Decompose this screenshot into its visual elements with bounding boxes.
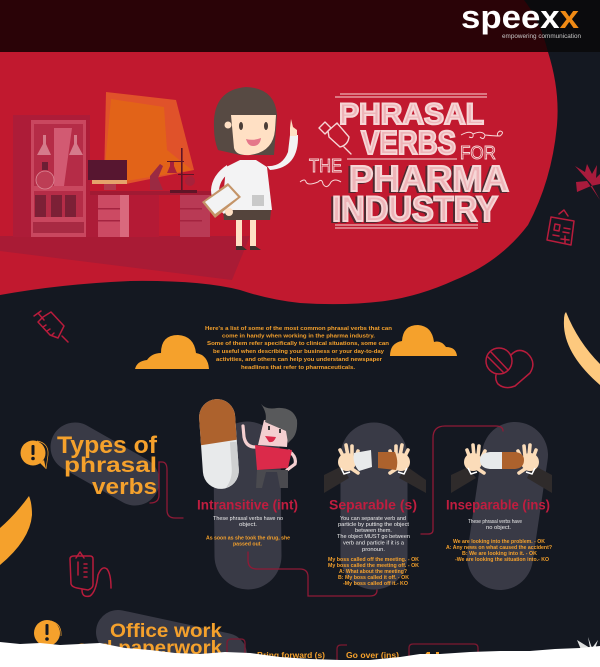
text: separable description: -My boss called off it.- KO [343,581,409,587]
logo: speexx: empowering communication [502,34,581,40]
sleeves [324,466,426,493]
text: inseparable description: A: Any news on what caused the accident? [446,545,553,551]
trousers [256,470,288,488]
icon: alert bubble 1 [20,440,48,469]
industry shadow: INDUSTRY [330,191,496,230]
verbs: VERBS [361,124,456,161]
face [231,115,276,155]
capsule half white [354,450,372,471]
intro paragraph: headlines that refer to pharmaceuticals. [241,365,355,371]
swirl left [300,180,341,187]
raised arm [267,135,298,170]
clipboard [202,183,241,218]
intro paragraph: Some of them refer specifically to clinical situations, some can [207,341,390,347]
legs [236,218,242,246]
skirt [223,210,271,220]
text: separable description: particle by putting the object [338,522,409,528]
head [258,420,289,447]
the: THE [309,156,342,176]
industry: INDUSTRY [332,190,498,229]
coat [222,160,272,210]
text: separable description: The object MUST go between [337,534,410,540]
connector: intransitive to separable [248,552,377,596]
illustration: scientist woman [202,87,298,250]
cuffs [341,468,407,474]
right hand [518,445,539,473]
cut-off label fragment [424,652,439,656]
plant tip [577,637,598,652]
text: inseparable description: no object. [486,525,511,531]
heading: types of phrasal verbs: Types of [57,432,158,459]
icon: clipboard [547,210,574,245]
torn paper edge [0,642,600,667]
text: inseparable description: These phrasal verbs have [468,519,522,525]
eyes [239,122,243,130]
capsule half brown [378,452,397,470]
illustration: broken capsule hands [324,445,426,493]
text: intransitive description: object. [239,522,257,528]
text: separable description: My boss called off the meeting. - OK [328,557,419,563]
sleeves [451,465,552,493]
shoes [236,246,247,250]
pharma shadow: PHARMA [347,159,507,200]
cuffs [468,468,535,474]
connector: separable to inseparable [421,426,503,534]
text: separable description: A: What about the meeting? [339,569,408,575]
intro paragraph: come in handy when working in the pharma industry. [222,334,375,340]
text: separable description: between them. [355,528,392,534]
finger [290,119,297,136]
text: intransitive description: passed out. [233,542,262,548]
text: inseparable description: -We are looking the situation into.- KO [455,557,550,563]
section bg pills [75,447,515,655]
left hand [464,445,485,473]
label: bring forward: Bring forward (s) [257,651,325,660]
cabinet [13,115,90,237]
icon: pills and heart [486,348,533,388]
title: phrasal verbs for the pharma industry [300,94,509,230]
mouth [246,138,261,146]
text: separable description: You can separate verb and [340,516,406,522]
intro paragraph: activities, and others can help you understand newspaper [216,357,383,363]
hair [214,87,277,155]
pharma: PHARMA [349,158,509,199]
right hand [390,445,410,473]
text: intransitive description: As soon as she took the drug, she [206,536,290,542]
red hero blob [0,52,558,304]
illustration: man [243,404,297,488]
phrasal: PHRASAL [339,98,484,131]
text: inseparable description: B: We are looking into it. - OK [462,551,537,557]
icon: iv bag [70,552,111,596]
mouth [265,436,276,442]
text: separable description: My boss called the meeting off. - OK [328,563,419,569]
heading: office work and paperwork: Office work [110,621,222,642]
monitor [88,160,127,190]
shirt [255,445,292,470]
connector: title to intransitive [150,462,183,518]
icon: title syringe [319,122,351,154]
connector brackets: office section [227,639,478,662]
logo: speexx: speexx [461,0,579,35]
illustration: laboratory scene [0,92,250,280]
heading: separable: Separable (s) [329,498,417,512]
text: inseparable description [446,519,553,563]
text: intransitive description [206,516,290,548]
text: intransitive description: These phrasal verbs have no [213,516,283,522]
illustration: whole capsule hands [451,445,552,493]
leaf right [564,312,600,385]
icon: alert bubble 2 [34,620,61,646]
left hand [338,445,358,473]
intro paragraph: be useful when describing your business or your day-to-day [213,349,385,355]
desk [88,191,215,237]
text: separable description: pronoun. [362,547,385,553]
cloud left [135,335,209,369]
heading: types of phrasal verbs: phrasal [64,454,157,477]
icon: syringe [34,311,68,342]
title rules [335,94,487,228]
heading: office work and paperwork: and paperwork [76,638,222,659]
for: FOR [460,143,496,163]
heading: intransitive: Intransitive (int) [197,498,298,512]
left arm [211,165,229,214]
heading: types of phrasal verbs [57,432,158,499]
capsule [480,452,502,469]
pocket [252,195,264,206]
label: go over: Go over (ins) [346,651,399,660]
intro paragraph [205,326,393,371]
orange window [104,92,194,184]
hair [261,404,297,443]
eyes [268,426,281,433]
heading: inseparable: Inseparable (ins) [446,498,550,512]
text: separable description: B: My boss called it off. - OK [338,575,409,581]
cloud right [390,325,457,356]
heading: office work and paperwork [76,621,222,659]
top header bar [0,0,600,52]
floor shadow [0,236,250,280]
arms [243,426,295,470]
text: separable description: verb and particle if it is a [343,540,405,546]
heading: types of phrasal verbs: verbs [92,474,157,499]
intro paragraph: Here's a list of some of the most common phrasal verbs that can [205,326,393,332]
text: inseparable description: We are looking into the problem. - OK [453,539,545,545]
microscope and flasks [150,148,197,193]
big capsule [198,398,240,490]
swirl right [461,131,502,139]
icon: plant leaf [575,164,600,200]
leaf left [0,496,32,565]
text: separable description [328,516,419,587]
